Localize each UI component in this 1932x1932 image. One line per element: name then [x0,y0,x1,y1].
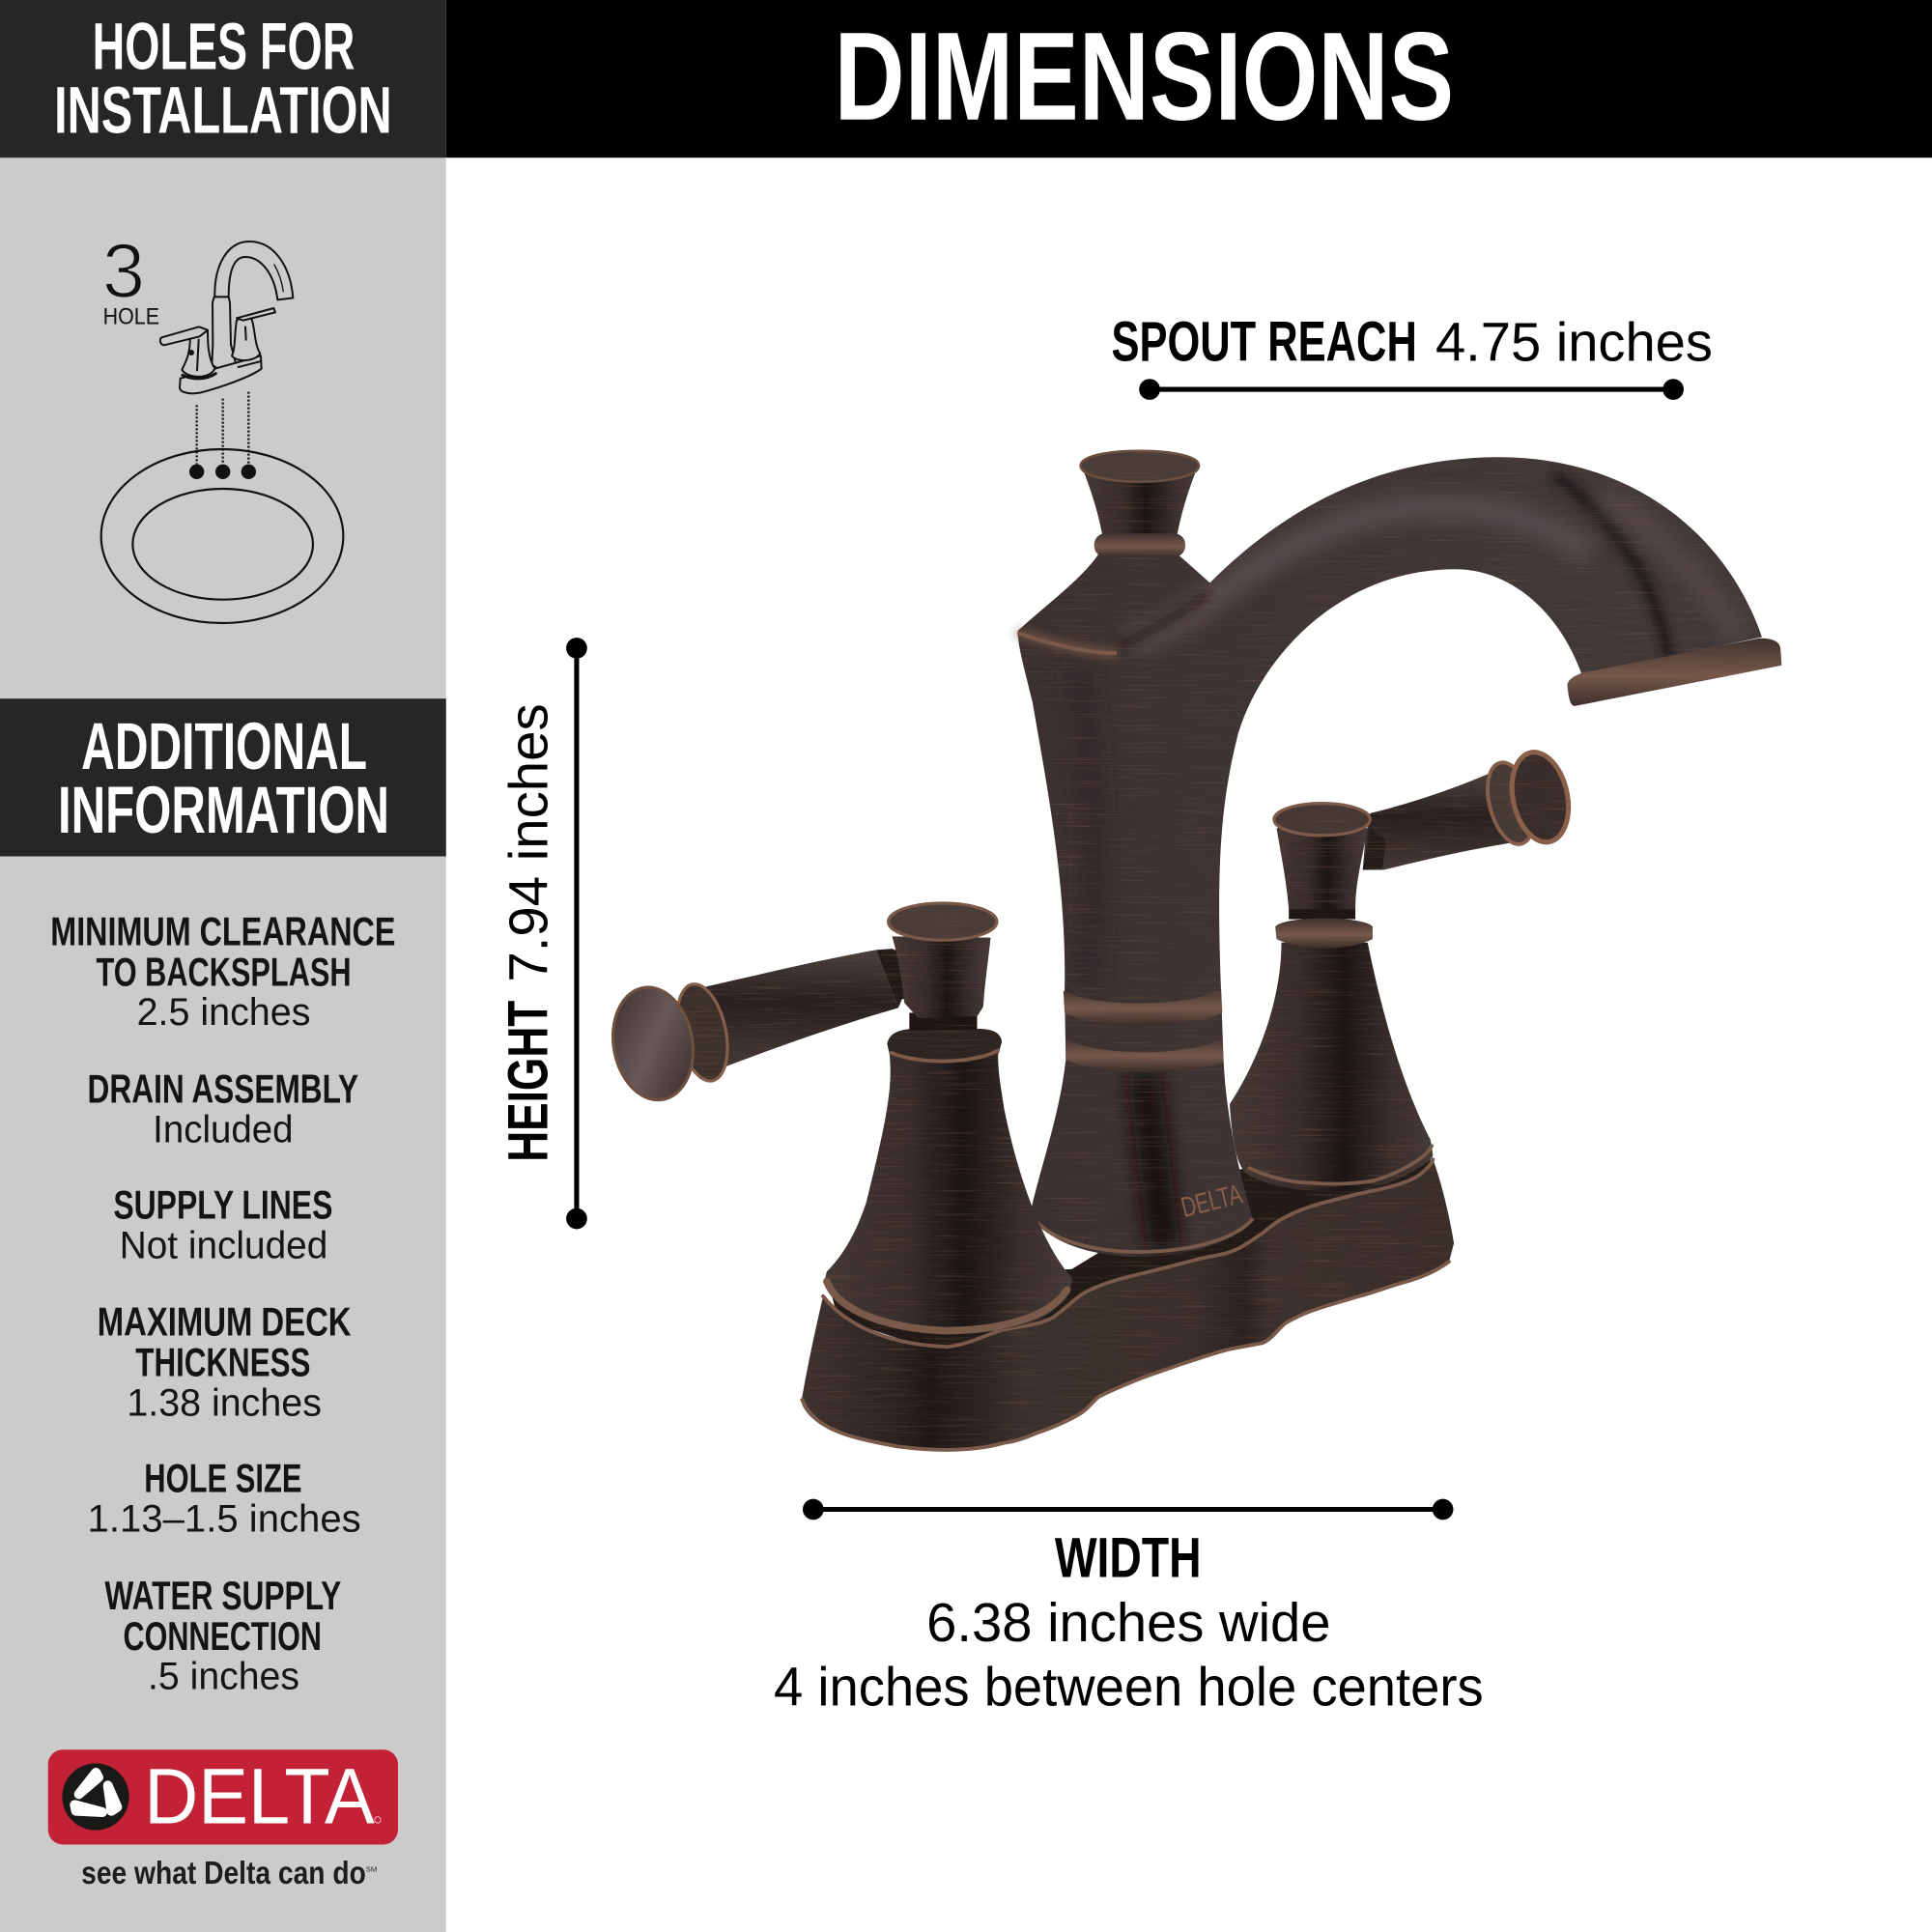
label: 3 hole [102,228,159,329]
spec: minimum clearance: MINIMUM CLEARANCE [50,908,395,953]
faucet: right handle [1230,747,1577,1191]
faucet: deck surface [828,1146,1433,1355]
icon: 3 hole faucet and basin [101,228,343,623]
heading: additional information: ADDITIONAL [81,709,367,783]
spec: hole size [88,1456,361,1540]
spec: minimum clearance: 2.5 inches [137,991,310,1034]
heading: holes for installation: INSTALLATION [54,73,392,148]
dimension: spout reach: SPOUT REACH [1112,311,1417,374]
spec: water supply connection: WATER SUPPLY [104,1573,341,1618]
dimension: width: 4 inches between hole centers [774,1656,1484,1717]
panel: left sidebar [0,0,446,1932]
spec: maximum deck thickness: 1.38 inches [127,1382,322,1425]
faucet illustration [605,451,1781,1450]
spout outlet flange [1567,639,1781,706]
spec: maximum deck thickness [98,1299,352,1425]
dimension: height [497,638,587,1229]
title banner: dimensions [446,0,1932,157]
faucet: central body and spout [1018,451,1781,1257]
label: 3 hole: HOLE [103,303,159,329]
line drawing: faucet [160,242,293,393]
dimension: width: 6.38 inches wide [926,1592,1331,1653]
spec: supply lines: SUPPLY LINES [113,1181,332,1227]
faucet: left handle [605,903,1072,1333]
dimension: height: HEIGHT [497,1001,559,1162]
heading: additional information [0,698,446,856]
spec: drain assembly [88,1066,358,1151]
spec: water supply connection: .5 inches [148,1656,299,1698]
logo: delta [48,1749,398,1891]
logo: delta: DELTA [144,1753,375,1841]
spec: hole size: HOLE SIZE [144,1456,301,1501]
title banner: dimensions: DIMENSIONS [835,6,1454,147]
spec: maximum deck thickness: MAXIMUM DECK [98,1299,352,1345]
line drawing: basin [101,449,343,623]
spec: supply lines: Not included [120,1224,327,1266]
icon: delta emblem [62,1763,129,1831]
dimension: width: WIDTH [1055,1527,1202,1590]
spec: drain assembly: DRAIN ASSEMBLY [88,1066,358,1112]
heading: holes for installation: HOLES FOR [93,9,355,83]
spec: water supply connection [104,1573,341,1698]
finial [1081,451,1199,557]
spec: hole size: 1.13–1.5 inches [88,1497,361,1540]
heading: holes for installation [0,0,446,157]
spec: minimum clearance: TO BACKSPLASH [96,949,352,994]
label: 3 hole: 3 [102,228,145,314]
brand mark on body: DELTA [1178,1178,1246,1224]
logo: delta: SM [366,1864,377,1873]
dimension: spout reach [1112,311,1713,400]
spec: maximum deck thickness: THICKNESS [135,1340,310,1385]
spec: drain assembly: Included [153,1108,294,1151]
spec: supply lines [113,1181,332,1266]
logo: delta: see what Delta can do [81,1856,366,1891]
mounting holes [189,392,256,479]
spec: minimum clearance [50,908,395,1034]
dimension: height: 7.94 inches [497,703,558,982]
spec: water supply connection: CONNECTION [124,1613,322,1659]
band rings [1064,988,1224,1071]
faucet: base plate [802,1159,1454,1450]
dimension: width [774,1499,1484,1717]
dimension: spout reach: 4.75 inches [1435,312,1713,373]
heading: additional information: INFORMATION [58,773,389,847]
